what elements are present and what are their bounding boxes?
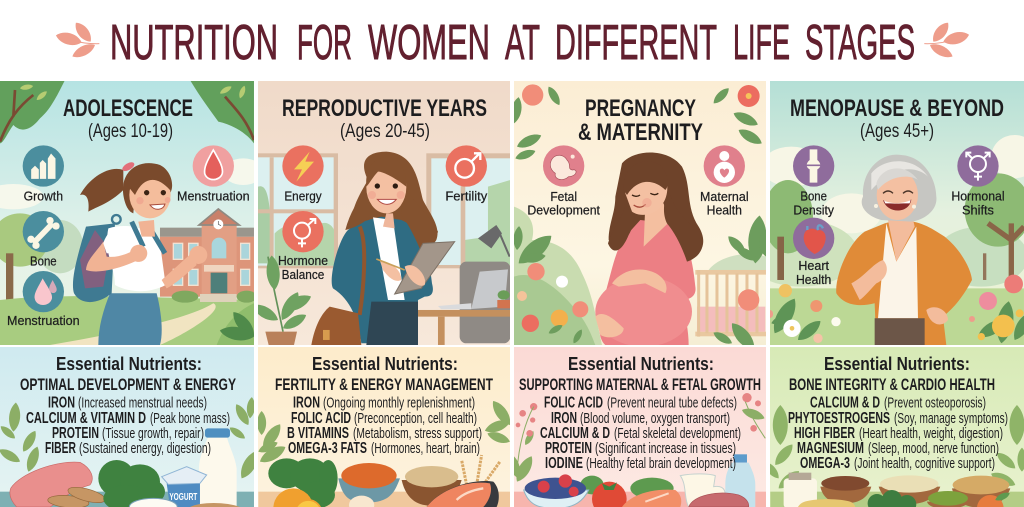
label: bone density bbox=[793, 189, 834, 218]
nutrients text: pregnancy: CALCIUM & D bbox=[540, 425, 610, 442]
label: maternal health: Maternal bbox=[700, 189, 749, 204]
heading: pregnancy and maternity: & MATERNITY bbox=[578, 119, 703, 146]
nutrients text: pregnancy: Essential Nutrients: bbox=[568, 353, 714, 374]
nutrients text: adolescence: IRON bbox=[48, 394, 75, 412]
title: AT bbox=[505, 16, 540, 70]
scene: background trees and lawn bbox=[0, 213, 254, 345]
scene: clouds bbox=[0, 158, 263, 209]
nutrients text: reproductive years: FOLIC ACID bbox=[291, 410, 351, 427]
label: fetal development: Development bbox=[527, 202, 600, 217]
nutrients text: pregnancy: IRON bbox=[551, 410, 577, 427]
icon: heart bbox=[793, 218, 834, 259]
label: bone density: Density bbox=[793, 203, 834, 218]
label: hormone balance: Hormone bbox=[278, 253, 328, 268]
nutrients text: pregnancy: SUPPORTING MATERNAL & FETAL GROWTH bbox=[519, 376, 761, 394]
nutrients text: reproductive years: FERTILITY & ENERGY MANAGEMENT bbox=[275, 376, 493, 394]
food: leafy greens bbox=[580, 476, 674, 499]
food: spinach bbox=[268, 458, 338, 507]
subheading: ages 10-19: (Ages 10-19) bbox=[88, 121, 173, 142]
label: fetal development: Fetal bbox=[550, 189, 577, 204]
scene: corner tree foliage bbox=[0, 80, 254, 143]
icon: fertility bbox=[446, 145, 487, 187]
scene: foreground plant bbox=[220, 312, 254, 340]
label: hormone balance: Balance bbox=[282, 267, 324, 282]
nutrients text: menopause: MAGNESIUM bbox=[797, 440, 864, 457]
food: grilled chicken bbox=[47, 484, 107, 507]
nutrients text: reproductive years: (Preconception, cell health) bbox=[354, 410, 477, 427]
panel: adolescence nutrients bbox=[0, 347, 263, 507]
nutrients text: reproductive years: IRON bbox=[293, 394, 320, 412]
decoration: side leaves bbox=[0, 397, 263, 481]
food: wheat stalks bbox=[462, 455, 500, 485]
icon: maternal health bbox=[704, 145, 745, 187]
food: tomato bbox=[592, 482, 627, 507]
nutrients text: pregnancy bbox=[519, 353, 761, 472]
subheading: ages 20-45: (Ages 20-45) bbox=[340, 121, 430, 142]
food: lentil bowl bbox=[338, 463, 400, 502]
title: WOMEN bbox=[368, 16, 490, 70]
nutrients text: adolescence: (Increased menstrual needs) bbox=[78, 394, 207, 412]
nutrients text: pregnancy: IODINE bbox=[545, 455, 583, 472]
nutrients text: pregnancy: PROTEIN bbox=[545, 440, 592, 457]
nutrients text: adolescence: (Peak bone mass) bbox=[150, 410, 230, 427]
scene: garden bushes bbox=[514, 207, 766, 345]
label: fetal development bbox=[527, 189, 600, 217]
food: yogurt cup: YOGURT bbox=[169, 492, 198, 503]
food: spinach bbox=[98, 460, 165, 507]
food: seed and grain bowls bbox=[820, 475, 1010, 507]
nutrients text: adolescence: PROTEIN bbox=[52, 425, 99, 442]
nutrients text: pregnancy: (Prevent neural tube defects) bbox=[607, 394, 737, 412]
nutrients text: adolescence: (Tissue growth, repair) bbox=[102, 425, 204, 442]
panel: reproductive years scene bbox=[250, 81, 511, 345]
nutrients text: reproductive years: OMEGA-3 FATS bbox=[288, 440, 367, 457]
label: bone density: Bone bbox=[800, 189, 827, 204]
label: menstruation lower: Menstruation bbox=[7, 313, 80, 328]
heading: adolescence: ADOLESCENCE bbox=[63, 95, 193, 122]
nutrients text: reproductive years: Essential Nutrients: bbox=[312, 353, 458, 374]
title: LIFE bbox=[733, 16, 790, 70]
food: salmon fillet bbox=[622, 490, 681, 507]
panel: reproductive years nutrients bbox=[257, 347, 514, 507]
nutrients text: adolescence: Essential Nutrients: bbox=[56, 353, 202, 374]
label: hormonal shifts: Shifts bbox=[962, 203, 994, 218]
icon: hormone balance bbox=[282, 211, 324, 252]
title: FOR bbox=[297, 16, 352, 70]
label: maternal health bbox=[700, 191, 748, 215]
nutrients text: adolescence: FIBER bbox=[45, 440, 76, 457]
nutrients text: reproductive years: B VITAMINS bbox=[287, 425, 349, 442]
label: heart health bbox=[796, 258, 831, 287]
icon: hormonal shifts bbox=[957, 145, 999, 187]
nutrients text: pregnancy: (Significant increase in tissues) bbox=[595, 440, 736, 457]
panel: menopause and beyond scene bbox=[745, 81, 1024, 345]
food: eggs bbox=[349, 496, 374, 507]
nutrients text: menopause: HIGH FIBER bbox=[794, 425, 855, 442]
food: berry bowl bbox=[524, 474, 589, 507]
icon: fetal development bbox=[543, 145, 584, 187]
food: orange bbox=[273, 488, 322, 507]
figure: laughing older woman in cardigan bbox=[836, 155, 972, 345]
heading: pregnancy and maternity: PREGNANCY bbox=[585, 95, 696, 122]
nutrients text: menopause: OMEGA-3 bbox=[800, 455, 850, 472]
nutrients text: adolescence: OPTIMAL DEVELOPMENT & ENERGY bbox=[20, 376, 236, 394]
panel: pregnancy and maternity scene bbox=[509, 81, 770, 354]
scene: desk, chair and laptop bbox=[417, 262, 511, 345]
scene: clouds, hills and park trees bbox=[745, 135, 1024, 345]
food: yogurt cup bbox=[162, 467, 207, 507]
label: hormonal shifts: Hormonal bbox=[951, 189, 1005, 204]
nutrients text: menopause bbox=[788, 353, 1008, 472]
food: red meat bbox=[689, 493, 749, 507]
nutrients text: menopause: CALCIUM & D bbox=[810, 394, 880, 412]
heading: pregnancy and maternity bbox=[578, 95, 703, 146]
figure: woman with clipboard and bag bbox=[311, 152, 455, 345]
nutrients text: pregnancy: (Healthy fetal brain development) bbox=[586, 455, 736, 472]
food: cottage cheese and crackers bbox=[129, 498, 240, 507]
icon: menstruation drop bbox=[193, 145, 234, 187]
nutrients text: reproductive years: (Metabolism, stress support) bbox=[353, 425, 482, 442]
title: DIFFERENT bbox=[555, 16, 717, 70]
subheading: ages 45+: (Ages 45+) bbox=[860, 121, 934, 142]
label: menstruation: Menstruation bbox=[177, 189, 250, 204]
panel: pregnancy nutrients bbox=[505, 347, 766, 507]
food: steak bbox=[10, 462, 92, 507]
food: milk jar bbox=[784, 473, 817, 507]
nutrients text: pregnancy: (Fetal skeletal development) bbox=[614, 425, 741, 442]
food: peach bbox=[977, 491, 1011, 507]
label: maternal health: Health bbox=[707, 202, 742, 217]
icon: water drops bbox=[23, 271, 64, 312]
label: hormonal shifts bbox=[951, 189, 1005, 218]
panel: adolescence scene bbox=[0, 80, 263, 345]
icon: bone density bbox=[793, 145, 834, 187]
scene: desk lamp bbox=[478, 225, 510, 257]
scene: school building bbox=[160, 209, 257, 303]
nutrients text: adolescence: CALCIUM & VITAMIN D bbox=[26, 410, 146, 427]
label: fertility: Fertility bbox=[445, 189, 488, 204]
food: milk bottle bbox=[199, 428, 237, 507]
nutrients text: menopause: PHYTOESTROGENS bbox=[788, 410, 890, 427]
food: broccoli bbox=[868, 490, 916, 507]
nutrients text: reproductive years bbox=[275, 353, 493, 457]
nutrients text: pregnancy: (Blood volume, oxygen transport) bbox=[580, 410, 730, 427]
figure: running girl with backpack bbox=[73, 160, 207, 345]
icon: growth bbox=[23, 145, 64, 187]
nutrients text: reproductive years: (Ongoing monthly replenishment) bbox=[323, 394, 475, 412]
scene: foreground flowers bbox=[766, 275, 1024, 345]
scene: potted plant bbox=[258, 256, 311, 345]
label: bone: Bone bbox=[30, 253, 57, 268]
label: heart health: Heart bbox=[798, 258, 829, 273]
title: STAGES bbox=[805, 16, 915, 70]
nutrients text: menopause: Essential Nutrients: bbox=[824, 353, 970, 374]
scene: crib bbox=[695, 270, 766, 337]
icon: bone bbox=[23, 211, 64, 252]
decoration: berry sprigs and leaves bbox=[505, 393, 766, 484]
food: water bottle bbox=[725, 454, 755, 507]
label: energy: Energy bbox=[284, 189, 322, 204]
food: salmon bbox=[427, 481, 499, 507]
heading: reproductive years: REPRODUCTIVE YEARS bbox=[282, 95, 487, 122]
nutrients text: adolescence bbox=[20, 353, 236, 457]
scene: office windows bbox=[256, 153, 511, 268]
decoration: side leaves bbox=[762, 405, 1024, 492]
food: peas bowl bbox=[927, 491, 969, 507]
label: growth: Growth bbox=[24, 189, 63, 204]
nutrients text: adolescence: (Sustained energy, digestion) bbox=[79, 440, 211, 457]
food: milk pitcher bbox=[680, 474, 725, 507]
icon: energy bbox=[282, 145, 324, 187]
icon: left title leaf sprig bbox=[54, 20, 99, 61]
nutrients text: pregnancy: FOLIC ACID bbox=[544, 394, 603, 412]
scene: flowers and foliage bbox=[509, 84, 770, 354]
title: NUTRITION bbox=[110, 16, 278, 70]
figure: pregnant woman bbox=[595, 152, 703, 347]
nutrients text: reproductive years: (Hormones, heart, brain) bbox=[371, 440, 480, 457]
decoration: side leaves bbox=[257, 398, 514, 466]
icon: right title leaf sprig bbox=[924, 20, 971, 61]
panel: menopause nutrients bbox=[762, 347, 1024, 507]
food: chickpea bowl bbox=[798, 499, 855, 507]
food: grain bowl bbox=[402, 466, 462, 506]
label: hormone balance bbox=[278, 256, 328, 280]
label: heart health: Health bbox=[796, 272, 831, 287]
